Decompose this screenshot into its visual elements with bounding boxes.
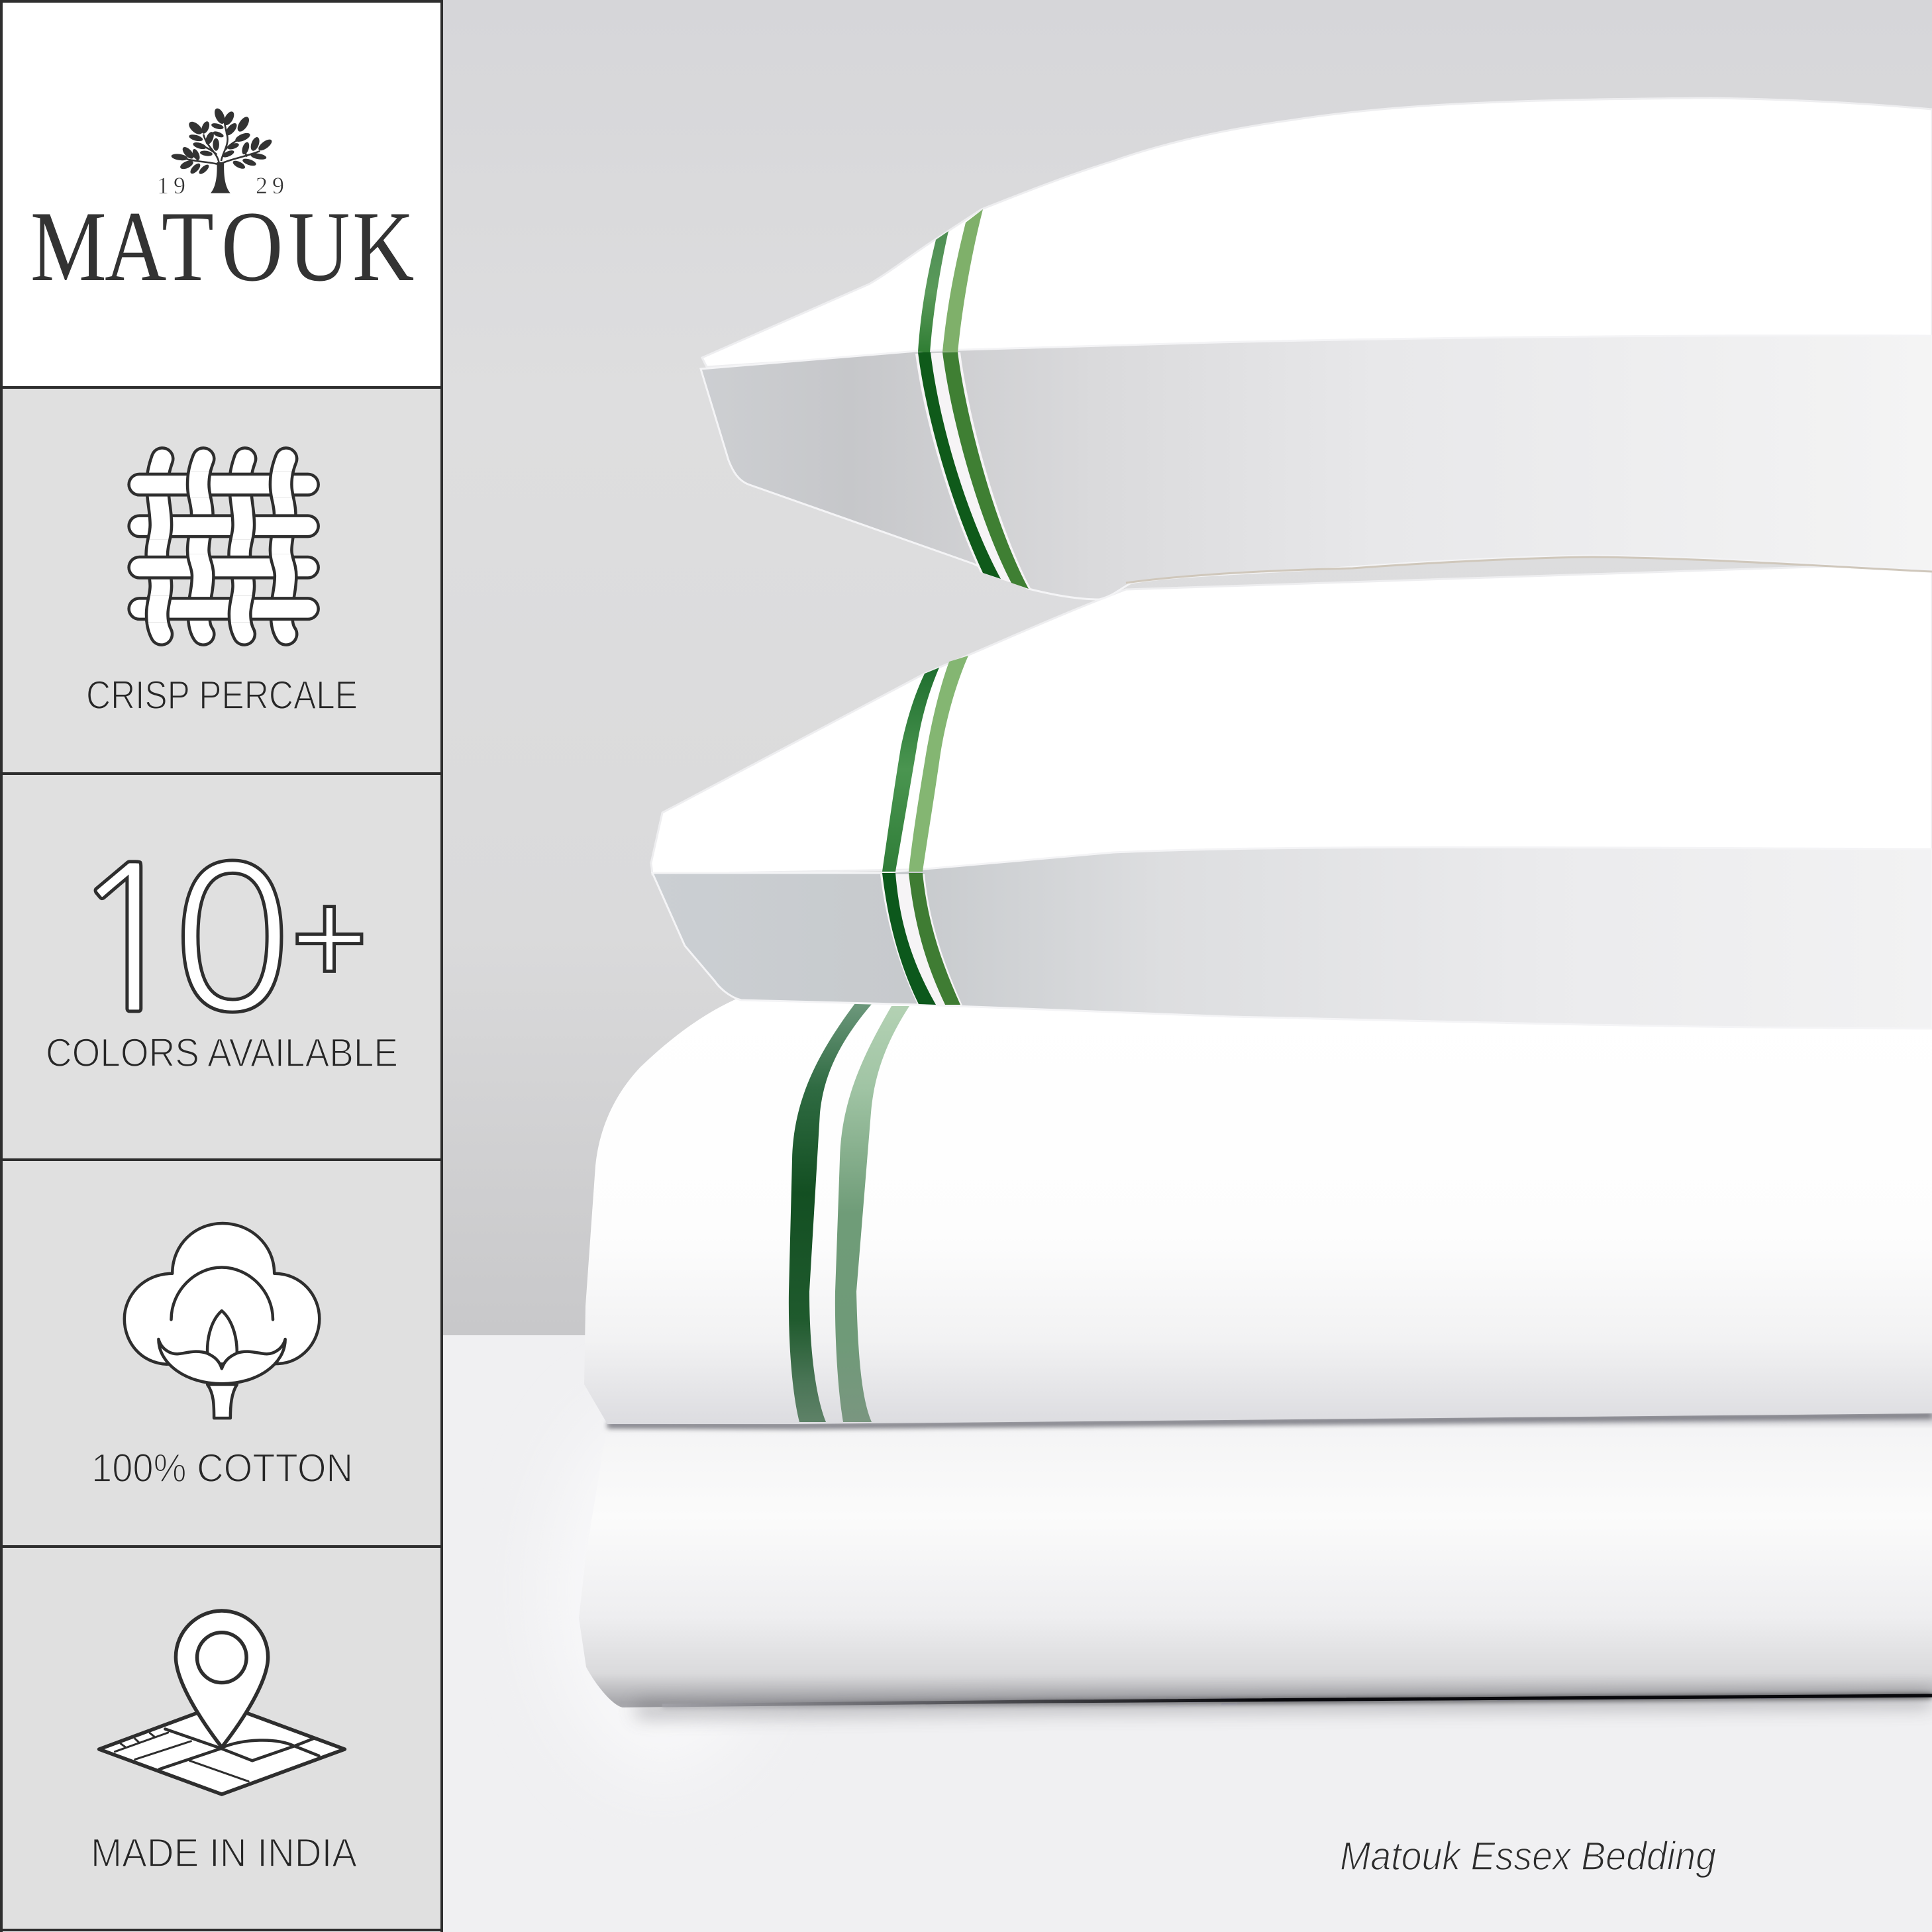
stripe: pillow light band, flange	[909, 873, 960, 1005]
label: MADE IN INDIA	[91, 1831, 357, 1875]
icon: cotton boll	[125, 1223, 319, 1418]
icon: tree	[171, 107, 274, 193]
panel: made in india	[1, 1547, 442, 1929]
panel borders	[0, 0, 443, 1932]
stripe: pillow light band, top face	[942, 209, 983, 352]
stripe: pillow light band, top face	[909, 656, 968, 872]
panel: crisp percale	[88, 446, 356, 709]
logo year left: 19	[157, 172, 190, 199]
label: COLORS AVAILABLE	[46, 1031, 398, 1075]
big number 10+: +	[291, 864, 368, 1011]
panel: colors available	[1, 774, 442, 1160]
photo: folded top sheet with double stripe	[584, 997, 1932, 1426]
stripe: light green sheet band	[835, 1006, 909, 1422]
big number 10+: 0	[171, 839, 293, 1040]
photo: folded bottom sheet	[579, 1413, 1932, 1710]
brand wordmark: MATOUK	[30, 190, 414, 302]
stripe: pillow dark band, top face	[882, 668, 939, 872]
big number 10+: 1	[67, 839, 189, 1040]
stripe: pillow dark band, top face	[918, 231, 948, 353]
icon: woven fabric	[139, 459, 308, 634]
panel: cotton	[1, 1160, 442, 1547]
caption: Matouk Essex Bedding	[1340, 1834, 1716, 1878]
logo year right: 29	[256, 172, 289, 199]
photo: lower pillow	[651, 563, 1932, 1029]
stripe: dark green sheet band	[789, 1003, 872, 1422]
icon: map pin	[99, 1611, 344, 1794]
label: CRISP PERCALE	[86, 673, 358, 717]
stripe: pillow dark band, flange	[882, 873, 936, 1005]
photo: upper pillow	[701, 98, 1932, 599]
panel: logo	[1, 1, 442, 387]
stripe: pillow light band, flange	[942, 352, 1029, 589]
label: 100% COTTON	[91, 1446, 353, 1490]
stripe: pillow dark band, flange	[918, 352, 1001, 579]
